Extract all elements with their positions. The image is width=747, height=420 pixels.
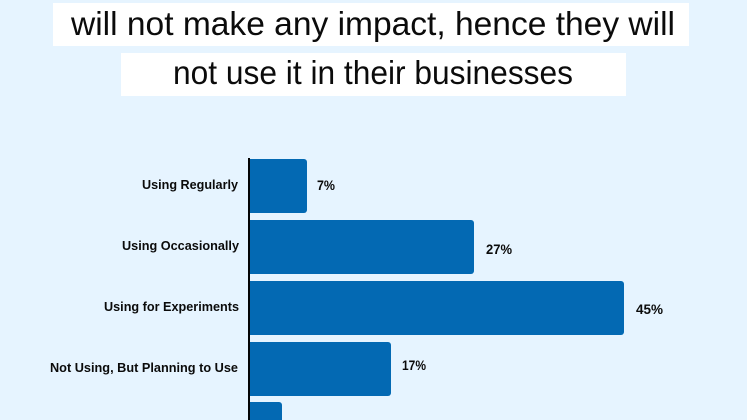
axis line xyxy=(248,158,250,420)
title line 2: not use it in their businesses xyxy=(173,54,573,91)
bar: Using Occasionally: 27% xyxy=(486,242,512,257)
bar: Using Occasionally xyxy=(122,220,512,274)
bar: Not Using, But Planning to Use: 17% xyxy=(402,358,426,373)
bar chart xyxy=(50,158,663,420)
bar: Using for Experiments: 45% xyxy=(636,302,663,317)
bar: Using Regularly: 7% xyxy=(317,178,335,193)
bar: Not Using, But Planning to Use xyxy=(50,342,426,396)
bar: Using Regularly: Using Regularly xyxy=(142,178,238,192)
bar: Using for Experiments xyxy=(104,281,663,335)
bar: Not Using, But Planning to Use: Not Using, But Planning to Use xyxy=(50,361,238,375)
title line 1: will not make any impact, hence they will xyxy=(70,5,675,42)
bar: Using Occasionally: Using Occasionally xyxy=(122,239,239,253)
bar: partially visible fifth bar xyxy=(249,402,282,420)
bar: Using for Experiments: Using for Experiments xyxy=(104,300,239,314)
title xyxy=(53,3,689,96)
bar: Using Regularly xyxy=(142,159,335,213)
